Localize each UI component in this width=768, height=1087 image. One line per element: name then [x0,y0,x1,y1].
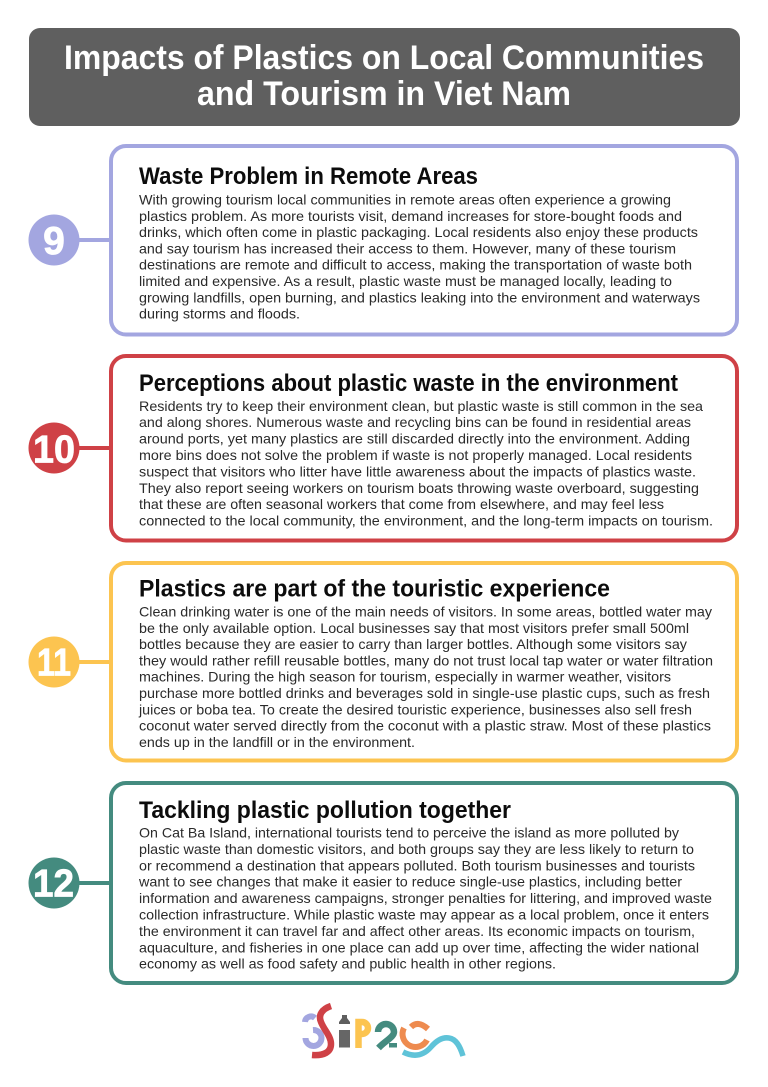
number badge 10 [28,422,112,474]
panel body text: that these are often seasonal workers that come from elsewhere, and may feel less [139,496,664,512]
title banner [29,28,740,126]
panel body text [139,192,700,322]
number badge 9: 9 [43,220,65,263]
panel body text: With growing tourism local communities in remote areas often experience a growing [139,192,671,208]
panel body text: limited and expensive. As a result, plastic waste must be managed locally, leading to [139,273,672,289]
panel body text: information and awareness campaigns, stronger penalties for littering, and improved waste [139,890,712,906]
panel body text: plastics problem. As more tourists visit, demand increases for store-bought foods and [139,208,682,224]
panel 10: perceptions about plastic waste [28,356,737,540]
panel frame [111,356,737,540]
panel body text: suspect that visitors who litter have little awareness about the impacts of plastics waste. [139,463,696,479]
panel body text [139,398,713,529]
panel body text: during storms and floods. [139,306,300,322]
panel body text: around ports, yet many plastics are still discarded directly into the environment. Adding [139,431,690,447]
panel body text: coconut water served directly from the coconut with a plastic straw. Most of these plastics [139,718,711,734]
panel frame [111,563,737,760]
panel body text: They also report seeing workers on tourism boats throwing waste overboard, suggesting [139,480,699,496]
panel 11: plastics are part of the touristic experience [28,563,737,760]
title banner: and Tourism in Viet Nam [197,75,571,113]
panel body text: the environment it can travel far and affect other areas. Its economic impacts on tourism, [139,923,695,939]
panel heading: Plastics are part of the touristic experience [139,576,610,602]
panel body text: Residents try to keep their environment clean, but plastic waste is still common in the sea [139,398,703,414]
logo letter S [312,1006,331,1055]
panel heading: Perceptions about plastic waste in the environment [139,370,678,397]
panel body text: drinks, which often come in plastic packaging. Local residents also enjoy these products [139,224,698,240]
logo wave [403,1038,463,1056]
panel body text: bottles because they are easier to carry than larger bottles. Although some visitors say [139,636,687,652]
panel body text: aquaculture, and fisheries in one place can add up over time, affecting the wider national [139,939,699,955]
panel body text: growing landfills, open burning, and plastics leaking into the environment and waterways [139,289,700,305]
number badge 11 [28,636,112,688]
panel body text: connected to the local community, the environment, and the long-term impacts on tourism. [139,513,713,529]
title banner: Impacts of Plastics on Local Communities [64,39,704,77]
logo numeral 2 [378,1024,397,1048]
panel heading: Tackling plastic pollution together [139,797,511,824]
number badge 9 [28,214,112,266]
number badge 10: 10 [33,428,75,472]
panel body text: more bins does not solve the problem if waste is not properly managed. Local residents [139,447,692,463]
number badge 12: 12 [33,862,74,906]
panel 9: waste problem in remote areas [28,146,737,334]
panel frame [111,783,737,983]
panel body text: they would rather refill reusable bottles, many do not trust local tap water or water filtration [139,652,713,668]
logo letter 3 [305,1016,322,1046]
panel body text: and along shores. Numerous waste and recycling bins can be found in residential areas [139,414,691,430]
logo letter C [403,1024,428,1047]
panel body text: plastic waste than domestic visitors, and both groups say they are less likely to return to [139,841,694,857]
panel body text: juices or boba tea. To create the desired touristic experience, businesses also sell fresh [138,701,692,717]
logo bottle I [339,1015,350,1048]
panel body text: be the only available option. Local businesses say that most visitors prefer small 500ml [139,620,689,636]
number badge 11: 11 [37,642,71,684]
panel body text: On Cat Ba Island, international tourists tend to perceive the island as more polluted by [139,824,679,840]
panel body text: want to see changes that make it easier to reduce single-use plastics, including better [138,874,682,890]
panel body text: purchase more bottled drinks and beverages sold in single-use plastic cups, such as fresh [139,685,710,701]
panel body text: and say tourism has increased their access to them. However, many of these tourism [139,240,676,256]
panel body text: economy as well as food safety and public health in other regions. [139,956,556,972]
panel body text [138,824,712,972]
logo: 3SIP2C [305,1006,463,1056]
panel body text: ends up in the landfill or in the environment. [139,734,415,750]
panel frame [111,146,737,334]
panel body text [138,604,713,750]
panel body text: collection infrastructure. While plastic waste may appear as a local problem, once it enters [139,906,709,922]
panel 12: tackling plastic pollution together [28,783,737,983]
panel body text: destinations are remote and difficult to access, making the transportation of waste both [139,257,692,273]
panel body text: or recommend a destination that appears polluted. Both tourism businesses and tourists [139,857,695,873]
number badge 12 [28,858,112,908]
panel heading: Waste Problem in Remote Areas [139,163,478,190]
panel body text: Clean drinking water is one of the main needs of visitors. In some areas, bottled water may [139,604,712,620]
panel body text: machines. During the high season for tourism, especially in warmer weather, visitors [139,669,671,685]
logo letter P [358,1022,368,1048]
